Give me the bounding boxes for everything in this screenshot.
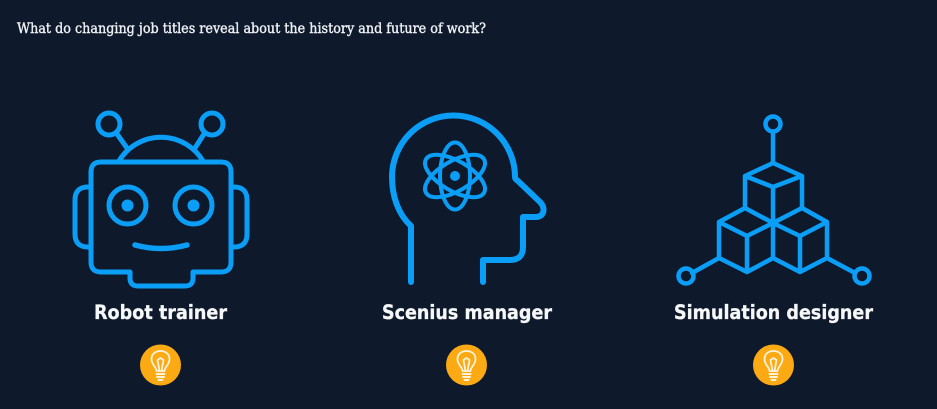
icon: robot [75,113,247,286]
icon: bulb button 3 [753,344,794,386]
label: Simulation designer: Simulation designer [674,301,873,324]
icon: bulb button 1 [140,344,181,386]
label: Robot trainer: Robot trainer [94,301,227,324]
icon: head with atom [392,115,543,282]
icon: bulb button 2 [446,344,487,386]
title: What do changing job titles reveal about the history and future of work? [17,21,486,37]
label: Scenius manager: Scenius manager [382,301,552,324]
icon: cubes network [678,116,870,284]
